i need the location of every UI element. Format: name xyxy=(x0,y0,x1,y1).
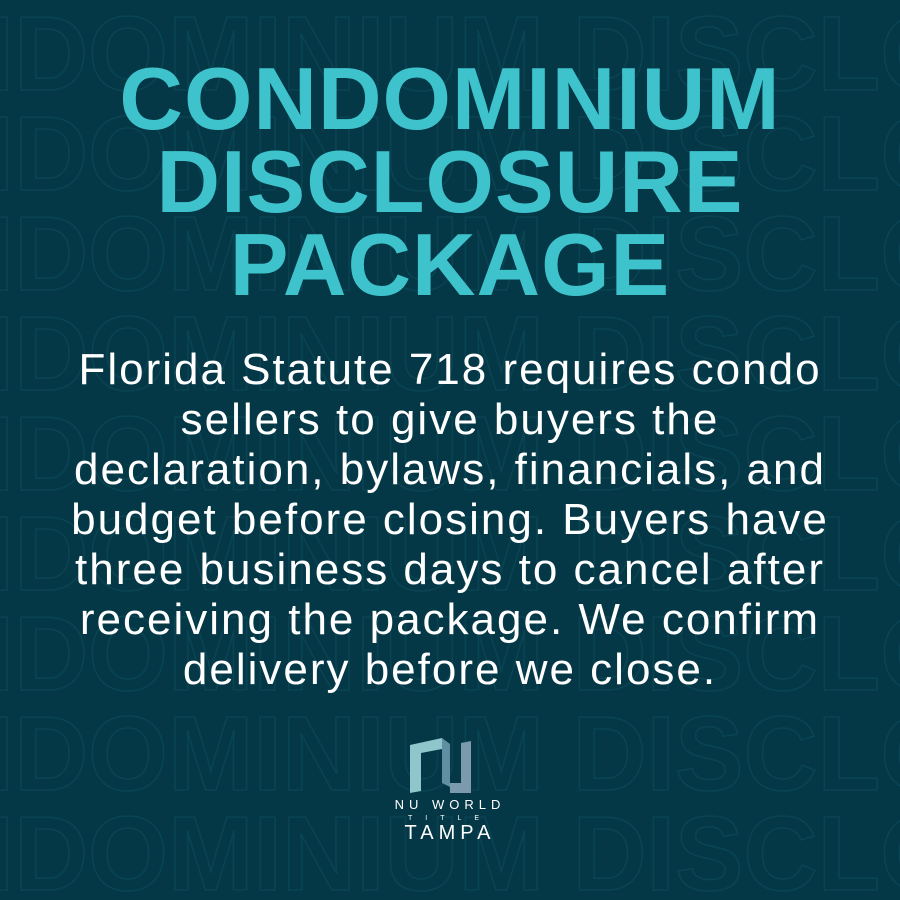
logo text: NU WORLD xyxy=(395,797,505,812)
body text: declaration, bylaws, financials, and xyxy=(74,445,826,494)
body text: Florida Statute 718 requires condo xyxy=(78,345,822,394)
body text xyxy=(71,345,829,694)
logo text: TITLE xyxy=(408,815,492,822)
logo text xyxy=(395,797,505,844)
logo: Nu World Title Tampa xyxy=(395,738,505,844)
icon: building N-U mark xyxy=(410,738,471,793)
title: PACKAGE xyxy=(230,215,670,314)
title: DISCLOSURE xyxy=(157,132,743,231)
logo text: TAMPA xyxy=(405,822,495,844)
body text: sellers to give buyers the xyxy=(181,395,719,444)
title xyxy=(119,49,781,314)
body text: three business days to cancel after xyxy=(75,545,825,594)
body text: delivery before we close. xyxy=(183,645,717,694)
body text: receiving the package. We confirm xyxy=(80,595,820,644)
title: CONDOMINIUM xyxy=(119,49,781,148)
body text: budget before closing. Buyers have xyxy=(71,495,829,544)
